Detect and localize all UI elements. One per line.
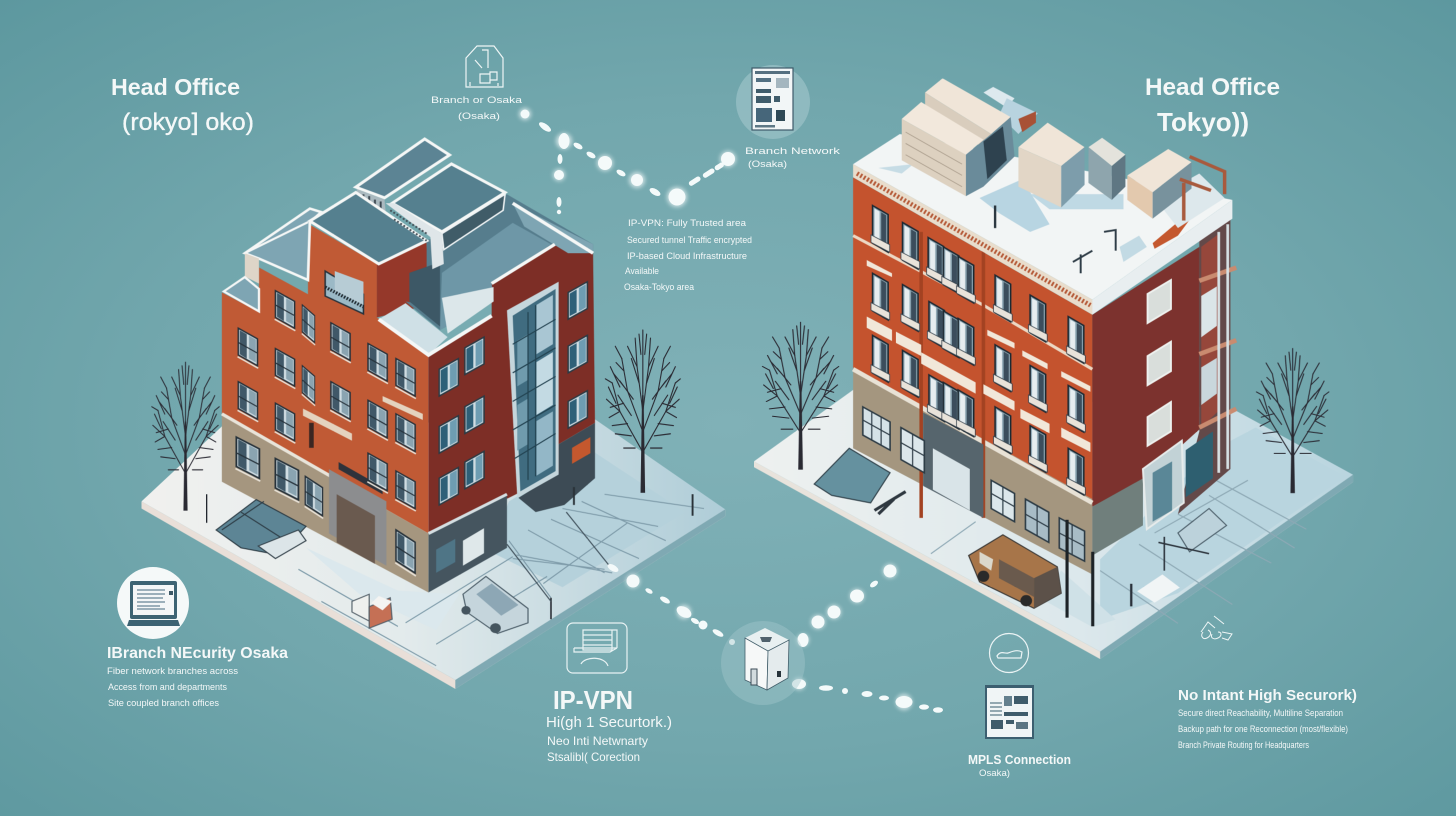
text block: ip-vpn notes: Available (625, 266, 659, 277)
title: head office right: Tokyo)) (1157, 107, 1249, 137)
icon: document in circle (736, 65, 810, 139)
text block: no intant high security: Secure direct Reachability, Multiline Separation (1178, 708, 1343, 719)
text block: no intant high security: Backup path for one Reconnection (most/flexible) (1178, 724, 1348, 735)
connection: top dotted network (519, 108, 736, 214)
base plate (141, 419, 725, 689)
tree: right (605, 330, 680, 493)
text block: no intant high security (1178, 687, 1357, 751)
label: branch network: Branch Network (745, 146, 840, 157)
text block: ip-vpn (546, 685, 672, 764)
text block: ip-vpn: IP-VPN (553, 685, 633, 715)
text block: ip-vpn notes (624, 218, 752, 293)
title: head office left: (rokyo] oko) (122, 109, 254, 136)
roof (224, 139, 593, 355)
icon: top outline server (466, 46, 503, 87)
icon: connection circle (990, 634, 1028, 672)
van (969, 535, 1061, 608)
connection: bottom dotted network (606, 562, 943, 713)
label: branch top: Branch or Osaka (431, 95, 523, 106)
label: branch network (745, 146, 840, 170)
text block: ip-vpn notes: Secured tunnel Traffic encrypted (627, 235, 752, 246)
text block: branch security osaka (107, 645, 288, 708)
label: branch top: (Osaka) (458, 111, 500, 122)
windows (235, 271, 587, 576)
text block: branch security osaka: Site coupled branch offices (108, 698, 220, 708)
text block: ip-vpn: Neo Inti Netwnarty (547, 734, 648, 748)
label: mpls connection: Osaka) (979, 768, 1010, 779)
text block: ip-vpn: Stsalibl( Corection (547, 750, 640, 764)
icon: laptop in circle (117, 567, 189, 639)
parked vehicles and street lamps (814, 448, 1227, 626)
text block: ip-vpn notes: IP-VPN: Fully Trusted area (628, 218, 747, 229)
entrance (329, 462, 386, 566)
text block: ip-vpn notes: IP-based Cloud Infrastructure (627, 251, 747, 262)
vehicles and street items (207, 487, 693, 634)
title: head office left: Head Office (111, 74, 240, 100)
rooftop units (902, 78, 1225, 273)
icon: sketch outline (1201, 616, 1232, 640)
building faces (853, 177, 1236, 574)
pilasters and ledges (853, 232, 1092, 518)
tree: left (152, 362, 219, 511)
title: head office left (111, 74, 254, 136)
windows (863, 206, 1085, 561)
text block: no intant high security: No Intant High Securork) (1178, 687, 1357, 704)
roof deck (853, 134, 1232, 315)
title: head office right (1145, 74, 1280, 137)
label: mpls connection (968, 752, 1071, 779)
text block: ip-vpn: Hi(gh 1 Securtork.) (546, 715, 672, 731)
text block: no intant high security: Branch Private Routing for Headquarters (1178, 740, 1309, 751)
text block: branch security osaka: Fiber network branches across (107, 666, 239, 676)
icon: document mpls (986, 685, 1033, 738)
tree: right (1256, 349, 1329, 493)
tree: left (762, 322, 839, 470)
text block: ip-vpn notes: Osaka-Tokyo area (624, 282, 695, 293)
text block: branch security osaka: Access from and departments (108, 682, 227, 692)
left building illustration (141, 139, 725, 689)
text block: branch security osaka: IBranch NEcurity Osaka (107, 645, 288, 662)
glass tower (507, 282, 559, 498)
label: mpls connection: MPLS Connection (968, 752, 1071, 767)
label: branch network: (Osaka) (748, 159, 787, 170)
icon: central network box (721, 621, 805, 705)
icon: ip-vpn device (567, 623, 627, 673)
base plate (754, 390, 1353, 659)
label: branch top (431, 95, 523, 122)
right building illustration (754, 78, 1353, 659)
building faces (222, 224, 595, 592)
title: head office right: Head Office (1145, 74, 1280, 101)
